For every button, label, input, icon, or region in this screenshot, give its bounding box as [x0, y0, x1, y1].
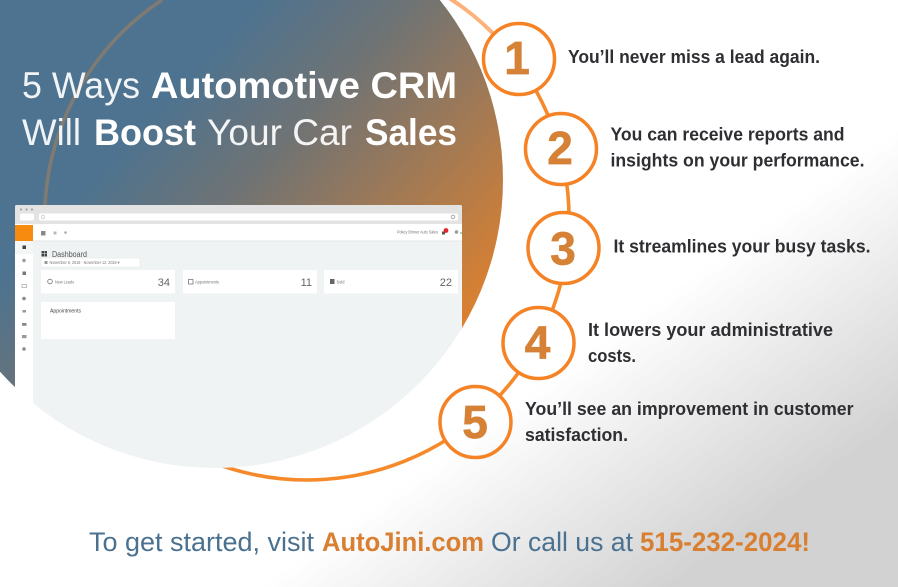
- top navigation bar: Pokey Brimer Auto Sales: [397, 230, 438, 234]
- date range picker: [42, 258, 140, 266]
- step 1: 1: [504, 32, 530, 84]
- step 2: [526, 114, 864, 184]
- top navigation bar: [15, 224, 462, 242]
- card: new leads: 34: [158, 277, 170, 289]
- step 4: [503, 308, 833, 378]
- step 1: [484, 24, 820, 94]
- step 4: costs.: [588, 346, 636, 366]
- orange connecting arc: [45, 0, 569, 480]
- step 2: You can receive reports and: [610, 124, 844, 144]
- title: Will: [22, 112, 81, 153]
- dashboard screenshot: [15, 205, 462, 468]
- date range picker: November 6, 2018 - November 12, 2018 ▾: [50, 260, 120, 265]
- card: appointments: Appointments: [195, 280, 219, 284]
- step 3: It streamlines your busy tasks.: [614, 236, 870, 256]
- title: [22, 65, 457, 153]
- gradient circle panel: [0, 0, 510, 400]
- title: Your Car: [207, 112, 352, 153]
- footer call to action: Or call us at: [491, 527, 633, 557]
- footer call to action: [89, 527, 810, 557]
- browser chrome: [15, 205, 462, 224]
- card: appointments: [183, 270, 317, 294]
- step 2: insights on your performance.: [610, 150, 864, 170]
- footer call to action: To get started, visit: [89, 527, 314, 557]
- orange logo tile: [15, 225, 33, 241]
- card: new leads: New Leads: [55, 280, 74, 284]
- dashboard heading: Dashboard: [52, 250, 87, 259]
- step 4: It lowers your administrative: [588, 320, 833, 340]
- footer call to action: AutoJini.com: [322, 527, 484, 557]
- title: 5 Ways: [22, 65, 140, 106]
- step 2: 2: [547, 122, 573, 174]
- sidebar: [15, 246, 33, 403]
- step 5: [440, 386, 854, 458]
- card: sold: [324, 270, 458, 294]
- card: new leads: [41, 270, 175, 294]
- title: Sales: [365, 112, 457, 153]
- card: appointments: 11: [301, 277, 312, 289]
- card: sold: Sold: [336, 280, 345, 284]
- dashboard heading: [42, 251, 86, 257]
- step 5: 5: [462, 396, 488, 448]
- step 1: You’ll never miss a lead again.: [568, 47, 820, 67]
- step 3: 3: [550, 222, 576, 274]
- step 3: [528, 212, 870, 284]
- title: Boost: [94, 112, 196, 153]
- step 5: satisfaction.: [525, 425, 628, 445]
- step 5: You’ll see an improvement in customer: [525, 399, 854, 419]
- appointments panel: [41, 302, 175, 339]
- card: sold: 22: [440, 277, 452, 289]
- step 4: 4: [525, 316, 551, 368]
- footer call to action: 515-232-2024!: [640, 527, 810, 557]
- title: Automotive CRM: [151, 65, 457, 106]
- appointments panel: Appointments: [50, 308, 82, 314]
